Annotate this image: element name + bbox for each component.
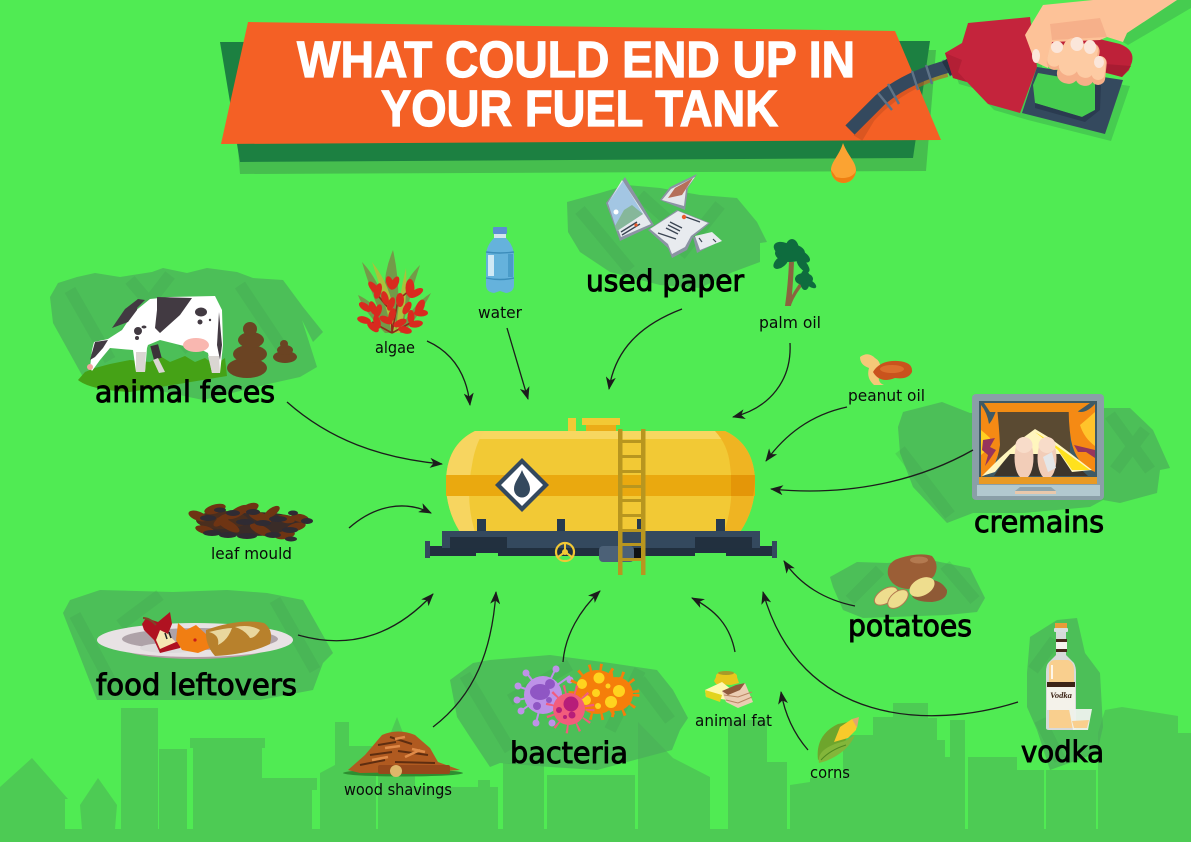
icon: vodka bottle (1046, 623, 1076, 730)
label: used paper (586, 264, 744, 298)
item: algae (356, 250, 431, 357)
nozzle shadow (951, 0, 1191, 141)
arrow: cremains (771, 450, 973, 491)
handle grip (1022, 67, 1123, 134)
icon: algae plant (356, 250, 431, 335)
item: vodka (1021, 623, 1104, 769)
dark green ribbon (220, 41, 930, 162)
item: peanut oil (848, 354, 925, 405)
flames (981, 405, 1000, 477)
item: potatoes (848, 554, 972, 643)
icon: fuel pump nozzle held by hand (850, 0, 1191, 141)
item: corns (810, 717, 859, 782)
feet (1014, 437, 1034, 479)
icon: vodka bottle: Vodka (1050, 690, 1073, 700)
hose shadow (858, 72, 947, 138)
icon: corn cob (818, 717, 859, 763)
grass (78, 356, 227, 392)
icon: water bottle (486, 227, 514, 293)
paint patch: used paper (567, 185, 767, 288)
orange ribbon (221, 22, 941, 144)
label: peanut oil (848, 386, 925, 405)
label: bacteria (510, 736, 628, 770)
arrow: used paper (609, 309, 682, 389)
label: cremains (974, 505, 1104, 539)
valve cylinder (599, 546, 644, 562)
item: wood shavings (343, 732, 463, 799)
arrows toward the tank (287, 309, 1018, 750)
icon: lard blocks and jar (705, 671, 753, 708)
arrow: wood shavings (433, 592, 496, 727)
icon: pink bacterium (550, 689, 590, 729)
arrow: corns (781, 692, 808, 750)
paint patch: potatoes (830, 560, 985, 618)
item: animal fat (695, 671, 772, 730)
arrow: water (507, 328, 528, 399)
label: corns (810, 763, 850, 782)
title line 2: YOUR FUEL TANK (381, 80, 778, 137)
label: food leftovers (96, 668, 297, 702)
shroud (994, 452, 1088, 476)
arrow: palm oil (733, 343, 790, 417)
tank body (446, 431, 755, 532)
item: animal feces (78, 296, 297, 409)
ladder (618, 429, 646, 575)
icon: orange bacterium (573, 668, 635, 716)
label: animal fat (695, 711, 772, 730)
arrow: animal fat (692, 598, 735, 652)
arm and hand (1025, 0, 1177, 68)
icon: potatoes (871, 554, 947, 612)
arrow: leaf mould (349, 506, 431, 528)
item: used paper (586, 174, 744, 298)
label: vodka (1021, 735, 1104, 769)
red trigger top (1035, 28, 1132, 77)
icon: leaf pile (187, 501, 313, 542)
icon: shot glass (1069, 709, 1092, 730)
toe tag (1043, 452, 1056, 472)
chassis (425, 519, 777, 558)
item: water (478, 227, 522, 322)
arrow: algae (427, 341, 470, 405)
icon: scattered paper (606, 174, 722, 258)
arrow: animal feces (287, 402, 442, 464)
fuel tank wagon (425, 418, 777, 575)
arrow: potatoes (784, 561, 855, 606)
icon: cremation furnace (972, 394, 1104, 500)
label: palm oil (759, 313, 821, 332)
item: cremains (972, 394, 1104, 539)
paint patch: vodka (1027, 618, 1103, 770)
icon: peanuts (860, 354, 912, 385)
paint patch: cremains (898, 402, 1170, 523)
yellow valve wheel (556, 543, 574, 561)
paint patch: food leftovers (63, 590, 333, 700)
hose (850, 60, 953, 130)
title line 1: WHAT COULD END UP IN (297, 31, 855, 88)
icon: dung piles (227, 322, 297, 378)
tank hatch (568, 418, 620, 431)
label: algae (375, 338, 415, 357)
icon: palm tree (771, 239, 818, 306)
city skyline silhouette (0, 703, 1191, 842)
icon: fuel drop (831, 143, 856, 183)
arrow: peanut oil (766, 407, 847, 461)
item: bacteria (510, 666, 635, 770)
hazard diamond (495, 458, 549, 512)
item: leaf mould (187, 501, 313, 563)
arrow: vodka (763, 592, 1018, 716)
red nozzle body (945, 17, 1037, 113)
icon: wood chip pile with log (343, 732, 463, 777)
label: leaf mould (211, 544, 292, 563)
arrow: food leftovers (298, 594, 433, 641)
icon: plate with apple core, orange and bread (97, 612, 293, 659)
label: animal feces (95, 375, 275, 409)
furnace tray (977, 485, 1100, 496)
banner shadow (230, 50, 936, 174)
item: palm oil (759, 239, 821, 332)
paint patch: bacteria (450, 655, 688, 770)
icon: purple bacterium (514, 666, 574, 726)
icon: cow (87, 296, 223, 373)
arrow: bacteria (563, 591, 600, 662)
item: food leftovers (96, 612, 297, 702)
title banner (220, 22, 941, 174)
paint patch: animal feces (50, 268, 323, 400)
label: potatoes (848, 609, 972, 643)
label: water (478, 303, 522, 322)
label: wood shavings (344, 780, 452, 799)
fingers (1045, 36, 1107, 88)
